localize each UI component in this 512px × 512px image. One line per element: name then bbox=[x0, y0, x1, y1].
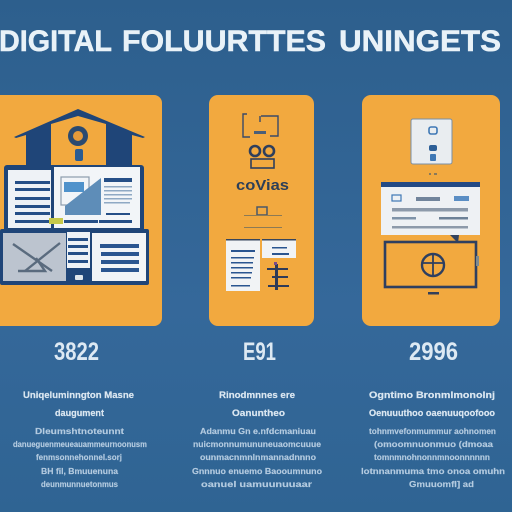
text block: right column: (omoomnuonmuo (dmoaa bbox=[374, 439, 493, 449]
text block: middle column: Oanuntheo bbox=[232, 408, 285, 419]
text block: right column bbox=[361, 390, 505, 489]
title: DIGITAL bbox=[0, 25, 112, 58]
text block: right column: Gmuuomfl] ad bbox=[409, 479, 474, 489]
title: UNINGETS bbox=[339, 25, 501, 58]
text block: left column bbox=[13, 390, 147, 489]
stat: first number: 3822 bbox=[54, 338, 99, 366]
decorative dots label bbox=[429, 173, 437, 175]
panel: left card bbox=[0, 95, 162, 326]
title: FOLUURTTES bbox=[122, 25, 326, 58]
text block: right column: lotnnanmuma tmo onoa omuhn bbox=[361, 466, 505, 476]
text block: middle column bbox=[192, 390, 322, 489]
text block: right column: tomnmnohnonnmnoonnnnnn bbox=[374, 452, 490, 462]
icon: house roof bbox=[14, 109, 145, 166]
icon: bracket frame bbox=[243, 114, 278, 137]
label: colias: coVias bbox=[236, 177, 289, 194]
stat: third number: 2996 bbox=[409, 338, 458, 366]
icon: document pair bbox=[226, 239, 296, 291]
text block: right column: tohnmvefonmummur aohnomen bbox=[369, 426, 496, 436]
icon: lower tool and list panel bbox=[0, 229, 149, 285]
text block: middle column: Rinodmnnes ere bbox=[219, 390, 295, 401]
icon: monitor with globe bbox=[385, 242, 479, 294]
panel: middle card bbox=[209, 95, 314, 326]
icon: small laptop bbox=[244, 207, 282, 228]
title bbox=[0, 25, 501, 58]
stat: second number: E91 bbox=[243, 338, 276, 366]
text block: right column: Oenuuuthoo oaenuuqoofooo bbox=[369, 408, 495, 419]
text block: right column: Ogntimo Bronmlmonolnj bbox=[369, 390, 495, 401]
text block: middle column: nuicmonnumununeuaomcuuue bbox=[193, 439, 321, 449]
icon: browser window bbox=[381, 182, 480, 243]
icon: twin symbol bbox=[250, 146, 274, 168]
text block: left column: fenmsonnehonnel.sorj bbox=[36, 452, 122, 462]
text block: left column: deunmunnuetonmus bbox=[41, 479, 118, 489]
text block: left column: Uniqeluminngton Masne bbox=[23, 390, 134, 401]
text block: left column: BH fil, Bmuuenuna bbox=[41, 466, 118, 476]
text block: left column: danueguenmeueauammeurnoonusm bbox=[13, 439, 147, 449]
text block: middle column: oanuel uamuunuuaar bbox=[201, 479, 313, 489]
text block: middle column: Adanmu Gn e.nfdcmaniuau bbox=[200, 426, 316, 436]
panel: right card bbox=[362, 95, 500, 326]
text block: middle column: ounmacnmnlnmannadnnno bbox=[200, 452, 316, 462]
icon: upper document screens bbox=[4, 165, 144, 232]
text block: left column: daugument bbox=[55, 408, 105, 419]
text block: left column: Dleumshtnoteunnt bbox=[35, 426, 124, 436]
text block: middle column: Gnnnuo enuemo Baooumnuno bbox=[192, 466, 322, 476]
icon: small tablet bbox=[411, 119, 452, 164]
